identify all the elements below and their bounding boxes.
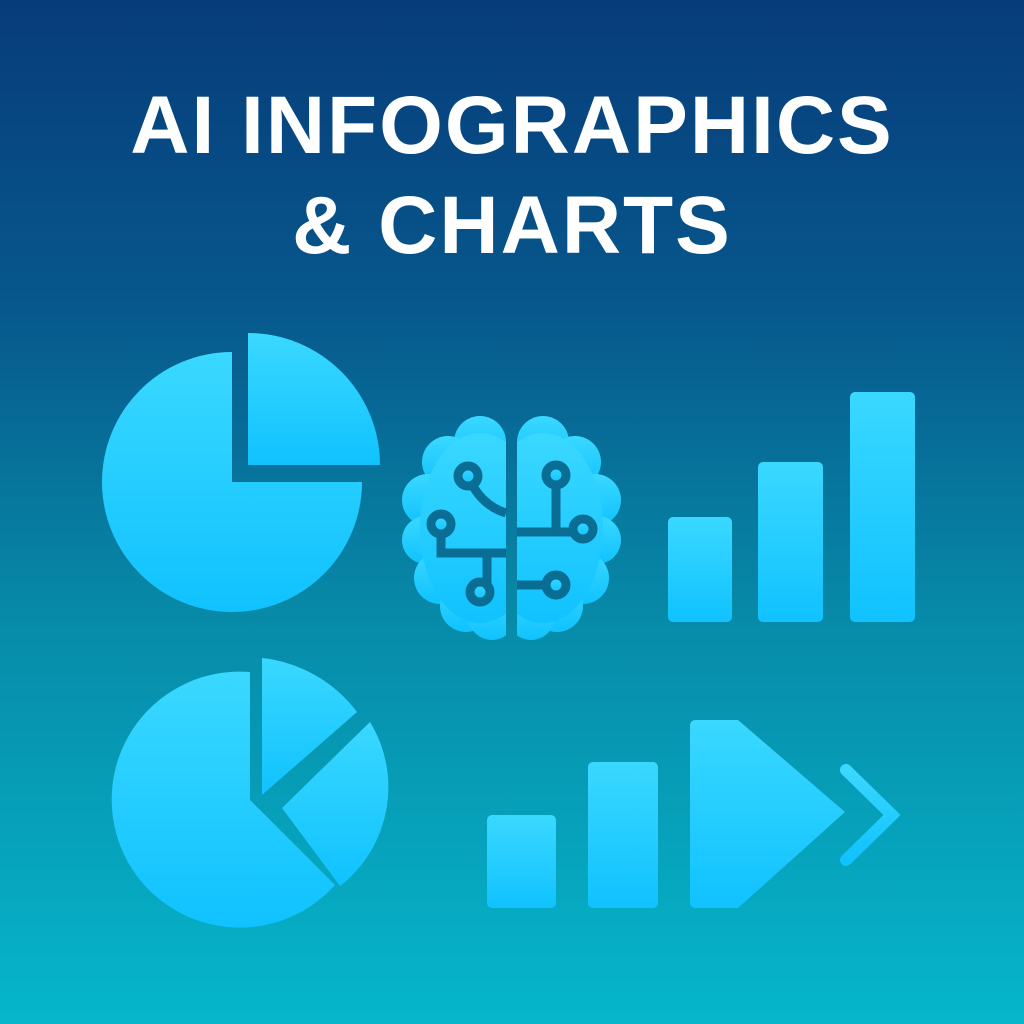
icon: AI brain <box>402 416 621 640</box>
pie chart 1 <box>102 333 380 612</box>
icon: chevron <box>846 770 892 860</box>
title <box>130 80 894 271</box>
title line 2: & CHARTS <box>292 180 732 271</box>
bar chart 1 <box>668 392 915 622</box>
brain circuits <box>431 465 593 602</box>
pie chart 2 <box>112 658 388 928</box>
bar chart 2 with arrow <box>487 720 892 908</box>
title line 1: AI INFOGRAPHICS <box>130 80 894 171</box>
